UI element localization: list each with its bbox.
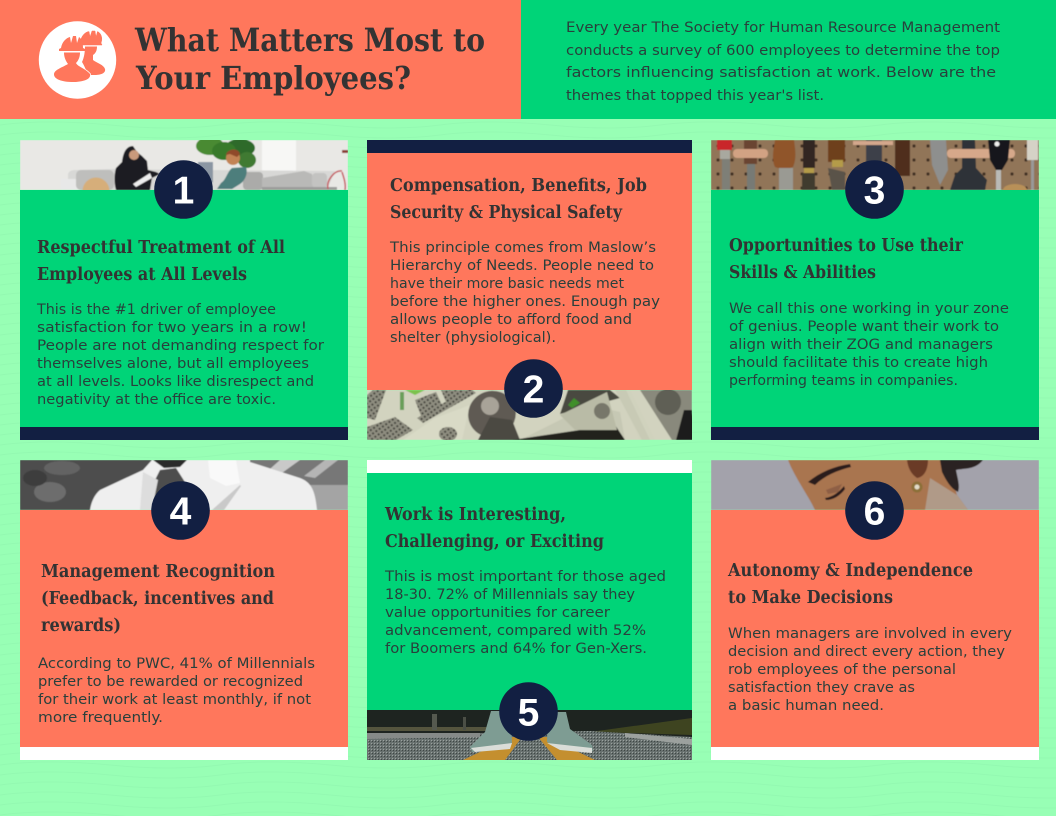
- body text: for Boomers and 64% for Gen-Xers.: [385, 641, 647, 657]
- body text: prefer to be rewarded or recognized: [38, 674, 303, 690]
- body text: This is the #1 driver of employee: [36, 302, 276, 318]
- panel: 4 management recognition: [20, 460, 348, 760]
- title: Your Employees?: [135, 59, 411, 97]
- number badge 1: [154, 160, 213, 219]
- number badge 1: 1: [173, 170, 194, 212]
- body text: This is most important for those aged: [384, 569, 666, 585]
- body text: shelter (physiological).: [390, 330, 556, 346]
- icon: two workers in hard hats: [39, 21, 116, 99]
- heading: rewards): [41, 616, 121, 636]
- number badge 3: [845, 160, 904, 219]
- heading: Management Recognition: [41, 562, 275, 582]
- intro paragraph: Every year The Society for Human Resource Management: [566, 20, 1001, 36]
- heading: Respectful Treatment of All: [37, 238, 285, 258]
- body text: at all levels. Looks like disrespect and: [37, 374, 314, 390]
- body text: This principle comes from Maslow’s: [389, 240, 656, 256]
- heading: to Make Decisions: [728, 588, 893, 608]
- heading: Employees at All Levels: [37, 265, 247, 285]
- body text: rob employees of the personal: [728, 662, 956, 678]
- heading: Security & Physical Safety: [390, 203, 623, 223]
- body text: decision and direct every action, they: [728, 644, 1005, 660]
- number badge 4: [151, 481, 210, 540]
- body text: should facilitate this to create high: [729, 355, 988, 371]
- photo: people on a sofa: [20, 140, 348, 190]
- intro paragraph: themes that topped this year's list.: [566, 88, 824, 104]
- heading: Work is Interesting,: [384, 505, 566, 525]
- number badge 6: 6: [864, 490, 885, 534]
- number badge 3: 3: [864, 170, 885, 212]
- heading: Opportunities to Use their: [729, 236, 964, 256]
- body text: According to PWC, 41% of Millennials: [38, 656, 315, 672]
- body text: satisfaction for two years in a row!: [37, 320, 307, 336]
- body text: a basic human need.: [728, 698, 884, 714]
- body text: performing teams in companies.: [729, 373, 958, 389]
- body text: for their work at least monthly, if not: [38, 692, 312, 708]
- body text: We call this one working in your zone: [729, 301, 1009, 317]
- panel: 2 compensation: [367, 140, 696, 445]
- photo: man in white suit: [20, 460, 348, 510]
- body text: have their more basic needs met: [390, 276, 625, 292]
- heading: Compensation, Benefits, Job: [390, 176, 647, 196]
- body text: of genius. People want their work to: [729, 319, 999, 335]
- heading: Challenging, or Exciting: [385, 532, 604, 552]
- photo: dollar bills: [367, 390, 692, 440]
- number badge 6: [845, 481, 904, 540]
- body text: more frequently.: [38, 710, 163, 726]
- body text: 18-30. 72% of Millennials say they: [385, 587, 635, 603]
- panel: 3 opportunities: [711, 140, 1039, 440]
- number badge 5: 5: [518, 692, 539, 734]
- panel: 5 interesting work: [367, 460, 692, 760]
- number badge 2: 2: [523, 368, 544, 412]
- body text: satisfaction they crave as: [728, 680, 915, 696]
- heading: Skills & Abilities: [729, 263, 876, 283]
- body text: negativity at the office are toxic.: [37, 392, 276, 408]
- photo: tools on pegboard: [711, 140, 1039, 190]
- body text: value opportunities for career: [385, 605, 610, 621]
- title: What Matters Most to: [134, 21, 485, 59]
- panel: 1 respectful treatment: [20, 137, 348, 440]
- number badge 2: [504, 359, 563, 418]
- body text: When managers are involved in every: [728, 626, 1012, 642]
- body text: themselves alone, but all employees: [37, 356, 309, 372]
- heading: Autonomy & Independence: [727, 561, 973, 581]
- body text: before the higher ones. Enough pay: [390, 294, 660, 310]
- body text: Hierarchy of Needs. People need to: [390, 258, 654, 274]
- body text: advancement, compared with 52%: [385, 623, 646, 639]
- body text: People are not demanding respect for: [37, 338, 324, 354]
- photo: woman looking down: [711, 460, 1039, 510]
- intro paragraph: factors influencing satisfaction at work. Below are the: [566, 65, 996, 81]
- heading: (Feedback, incentives and: [41, 589, 274, 609]
- body text: allows people to afford food and: [390, 312, 632, 328]
- photo: sneakers on road: [367, 710, 692, 760]
- header banner: [0, 0, 1056, 119]
- number badge 5: [499, 682, 558, 741]
- intro paragraph: conducts a survey of 600 employees to determine the top: [566, 43, 1000, 59]
- body text: align with their ZOG and managers: [729, 337, 993, 353]
- panel: 6 autonomy: [711, 460, 1039, 760]
- number badge 4: 4: [170, 490, 192, 534]
